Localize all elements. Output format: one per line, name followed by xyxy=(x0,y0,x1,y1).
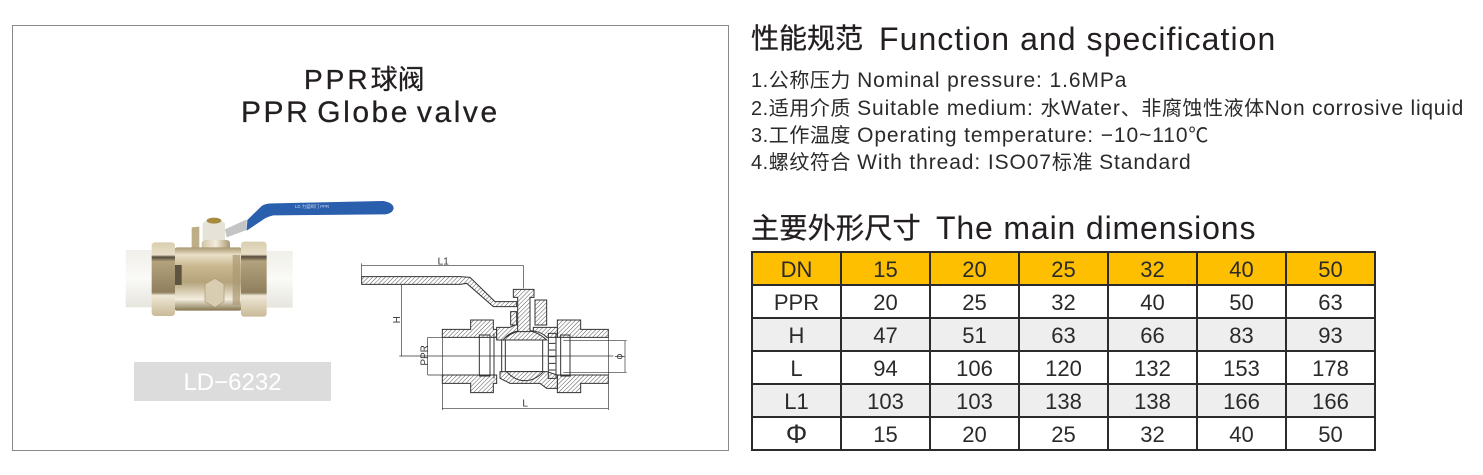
table: dimensions: 20 xyxy=(873,290,898,314)
table: dimensions: L1 xyxy=(784,388,809,414)
table: dimensions: 15 xyxy=(873,422,898,446)
table: dimensions: 25 xyxy=(962,290,987,314)
table: dimensions: 106 xyxy=(956,356,993,380)
photo: brass ball valve: LD 力盛阀门 PPR xyxy=(295,203,329,210)
spec: temperature: 3.工作温度 Operating temperature: −10~110℃ xyxy=(751,124,1209,147)
title: Chinese product name: PPR球阀 xyxy=(304,64,425,95)
table: dimensions: DN xyxy=(781,256,812,282)
heading: main dimensions xyxy=(751,210,1256,246)
table: dimensions: 63 xyxy=(1051,322,1076,348)
heading: main dimensions: The main dimensions xyxy=(936,210,1256,246)
table: dimensions: 83 xyxy=(1229,322,1254,348)
table: dimensions: 178 xyxy=(1312,356,1349,380)
text block: specifications xyxy=(751,69,1464,174)
table: dimensions: 120 xyxy=(1045,356,1082,380)
table: dimensions: 32 xyxy=(1051,290,1076,314)
table: dimensions: 25 xyxy=(1051,422,1076,446)
table: dimensions: 153 xyxy=(1223,356,1260,380)
table: dimensions: 66 xyxy=(1140,322,1165,348)
table: dimensions: 166 xyxy=(1223,388,1260,414)
table: dimensions: 20 xyxy=(962,256,987,282)
photo: brass ball valve xyxy=(126,201,394,317)
technical drawing: valve section: L xyxy=(522,399,528,410)
table: dimensions: Φ xyxy=(786,418,807,448)
spec: medium: 2.适用介质 Suitable medium: 水Water、非腐蚀性液体Non corrosive liquid xyxy=(751,97,1464,120)
badge: model number: LD−6232 xyxy=(183,369,282,396)
table: dimensions: 103 xyxy=(867,388,904,414)
technical drawing: valve section xyxy=(361,256,627,410)
table: dimensions: 63 xyxy=(1318,290,1343,314)
table: dimensions: H xyxy=(789,322,804,348)
table: dimensions: 103 xyxy=(956,388,993,414)
table: dimensions: 40 xyxy=(1229,256,1254,282)
table: dimensions: 138 xyxy=(1134,388,1171,414)
table: dimensions: 50 xyxy=(1229,290,1254,314)
spec: nominal pressure: 1.公称压力 Nominal pressure: 1.6MPa xyxy=(751,69,1127,92)
table: dimensions: L xyxy=(790,356,803,380)
table: dimensions: PPR xyxy=(774,290,819,314)
spec: thread: 4.螺纹符合 With thread: ISO07标准 Standard xyxy=(751,151,1192,174)
panel: product xyxy=(12,25,729,451)
table: dimensions: 20 xyxy=(962,422,987,446)
badge: model number xyxy=(134,362,331,401)
table: dimensions: 50 xyxy=(1318,256,1343,282)
table: dimensions: 32 xyxy=(1140,422,1165,446)
table: dimensions: 94 xyxy=(873,356,898,380)
title: English product name: PPR Globe valve xyxy=(241,96,500,129)
table: dimensions xyxy=(751,251,1376,451)
table: dimensions: 132 xyxy=(1134,356,1171,380)
table: dimensions: 32 xyxy=(1140,256,1165,282)
table: dimensions: 15 xyxy=(873,256,898,282)
table: dimensions: 93 xyxy=(1318,322,1343,348)
technical drawing: valve section: ϕ xyxy=(615,353,626,359)
table: dimensions: 138 xyxy=(1045,388,1082,414)
technical drawing: valve section: L1 xyxy=(438,256,449,267)
table: dimensions: 40 xyxy=(1140,290,1165,314)
table: dimensions: 50 xyxy=(1318,422,1343,446)
table: dimensions: 51 xyxy=(962,322,987,348)
technical drawing: valve section: H xyxy=(392,316,403,323)
table: dimensions: 40 xyxy=(1229,422,1254,446)
technical drawing: valve section: PPR xyxy=(419,345,430,366)
table: dimensions: 47 xyxy=(873,322,898,348)
table: dimensions: 25 xyxy=(1051,256,1076,282)
table: dimensions: 166 xyxy=(1312,388,1349,414)
heading: main dimensions: 主要外形尺寸 xyxy=(751,212,921,244)
heading: function and specification: 性能规范 xyxy=(751,23,863,54)
heading: function and specification: Function and specification xyxy=(879,21,1276,57)
